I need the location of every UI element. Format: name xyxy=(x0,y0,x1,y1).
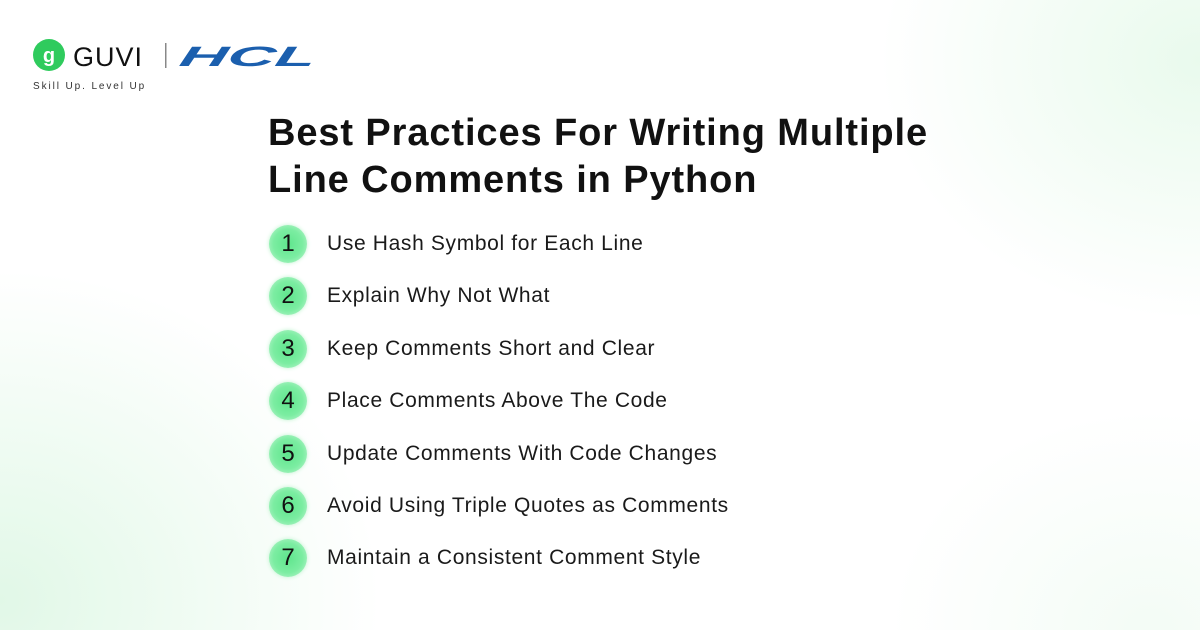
logo: g xyxy=(43,45,55,67)
item 3: 3 xyxy=(281,335,295,362)
logo xyxy=(33,39,320,92)
item 6 xyxy=(267,485,729,527)
title: Line Comments in Python xyxy=(268,159,757,201)
logo: Skill Up. Level Up xyxy=(33,81,146,92)
item 3: Keep Comments Short and Clear xyxy=(327,337,655,360)
item 5: 5 xyxy=(281,440,295,467)
item 3 xyxy=(267,328,655,370)
item 7 xyxy=(267,537,701,579)
title xyxy=(268,112,928,201)
item 7: Maintain a Consistent Comment Style xyxy=(327,546,701,569)
item 2: 2 xyxy=(281,282,295,309)
item 1 xyxy=(267,223,644,265)
item 2 xyxy=(267,275,550,317)
item 4: 4 xyxy=(281,387,295,414)
item 1: 1 xyxy=(281,230,295,257)
item 2: Explain Why Not What xyxy=(327,284,550,307)
item 1: Use Hash Symbol for Each Line xyxy=(327,232,644,255)
list of practices xyxy=(267,223,729,579)
logo: HCL xyxy=(177,40,320,72)
item 5 xyxy=(267,433,717,475)
item 7: 7 xyxy=(281,544,295,571)
item 4 xyxy=(267,380,668,422)
item 5: Update Comments With Code Changes xyxy=(327,442,717,465)
item 6: 6 xyxy=(281,492,295,519)
item 4: Place Comments Above The Code xyxy=(327,389,668,412)
logo: GUVI xyxy=(73,42,143,72)
title: Best Practices For Writing Multiple xyxy=(268,112,928,154)
item 6: Avoid Using Triple Quotes as Comments xyxy=(327,494,729,517)
